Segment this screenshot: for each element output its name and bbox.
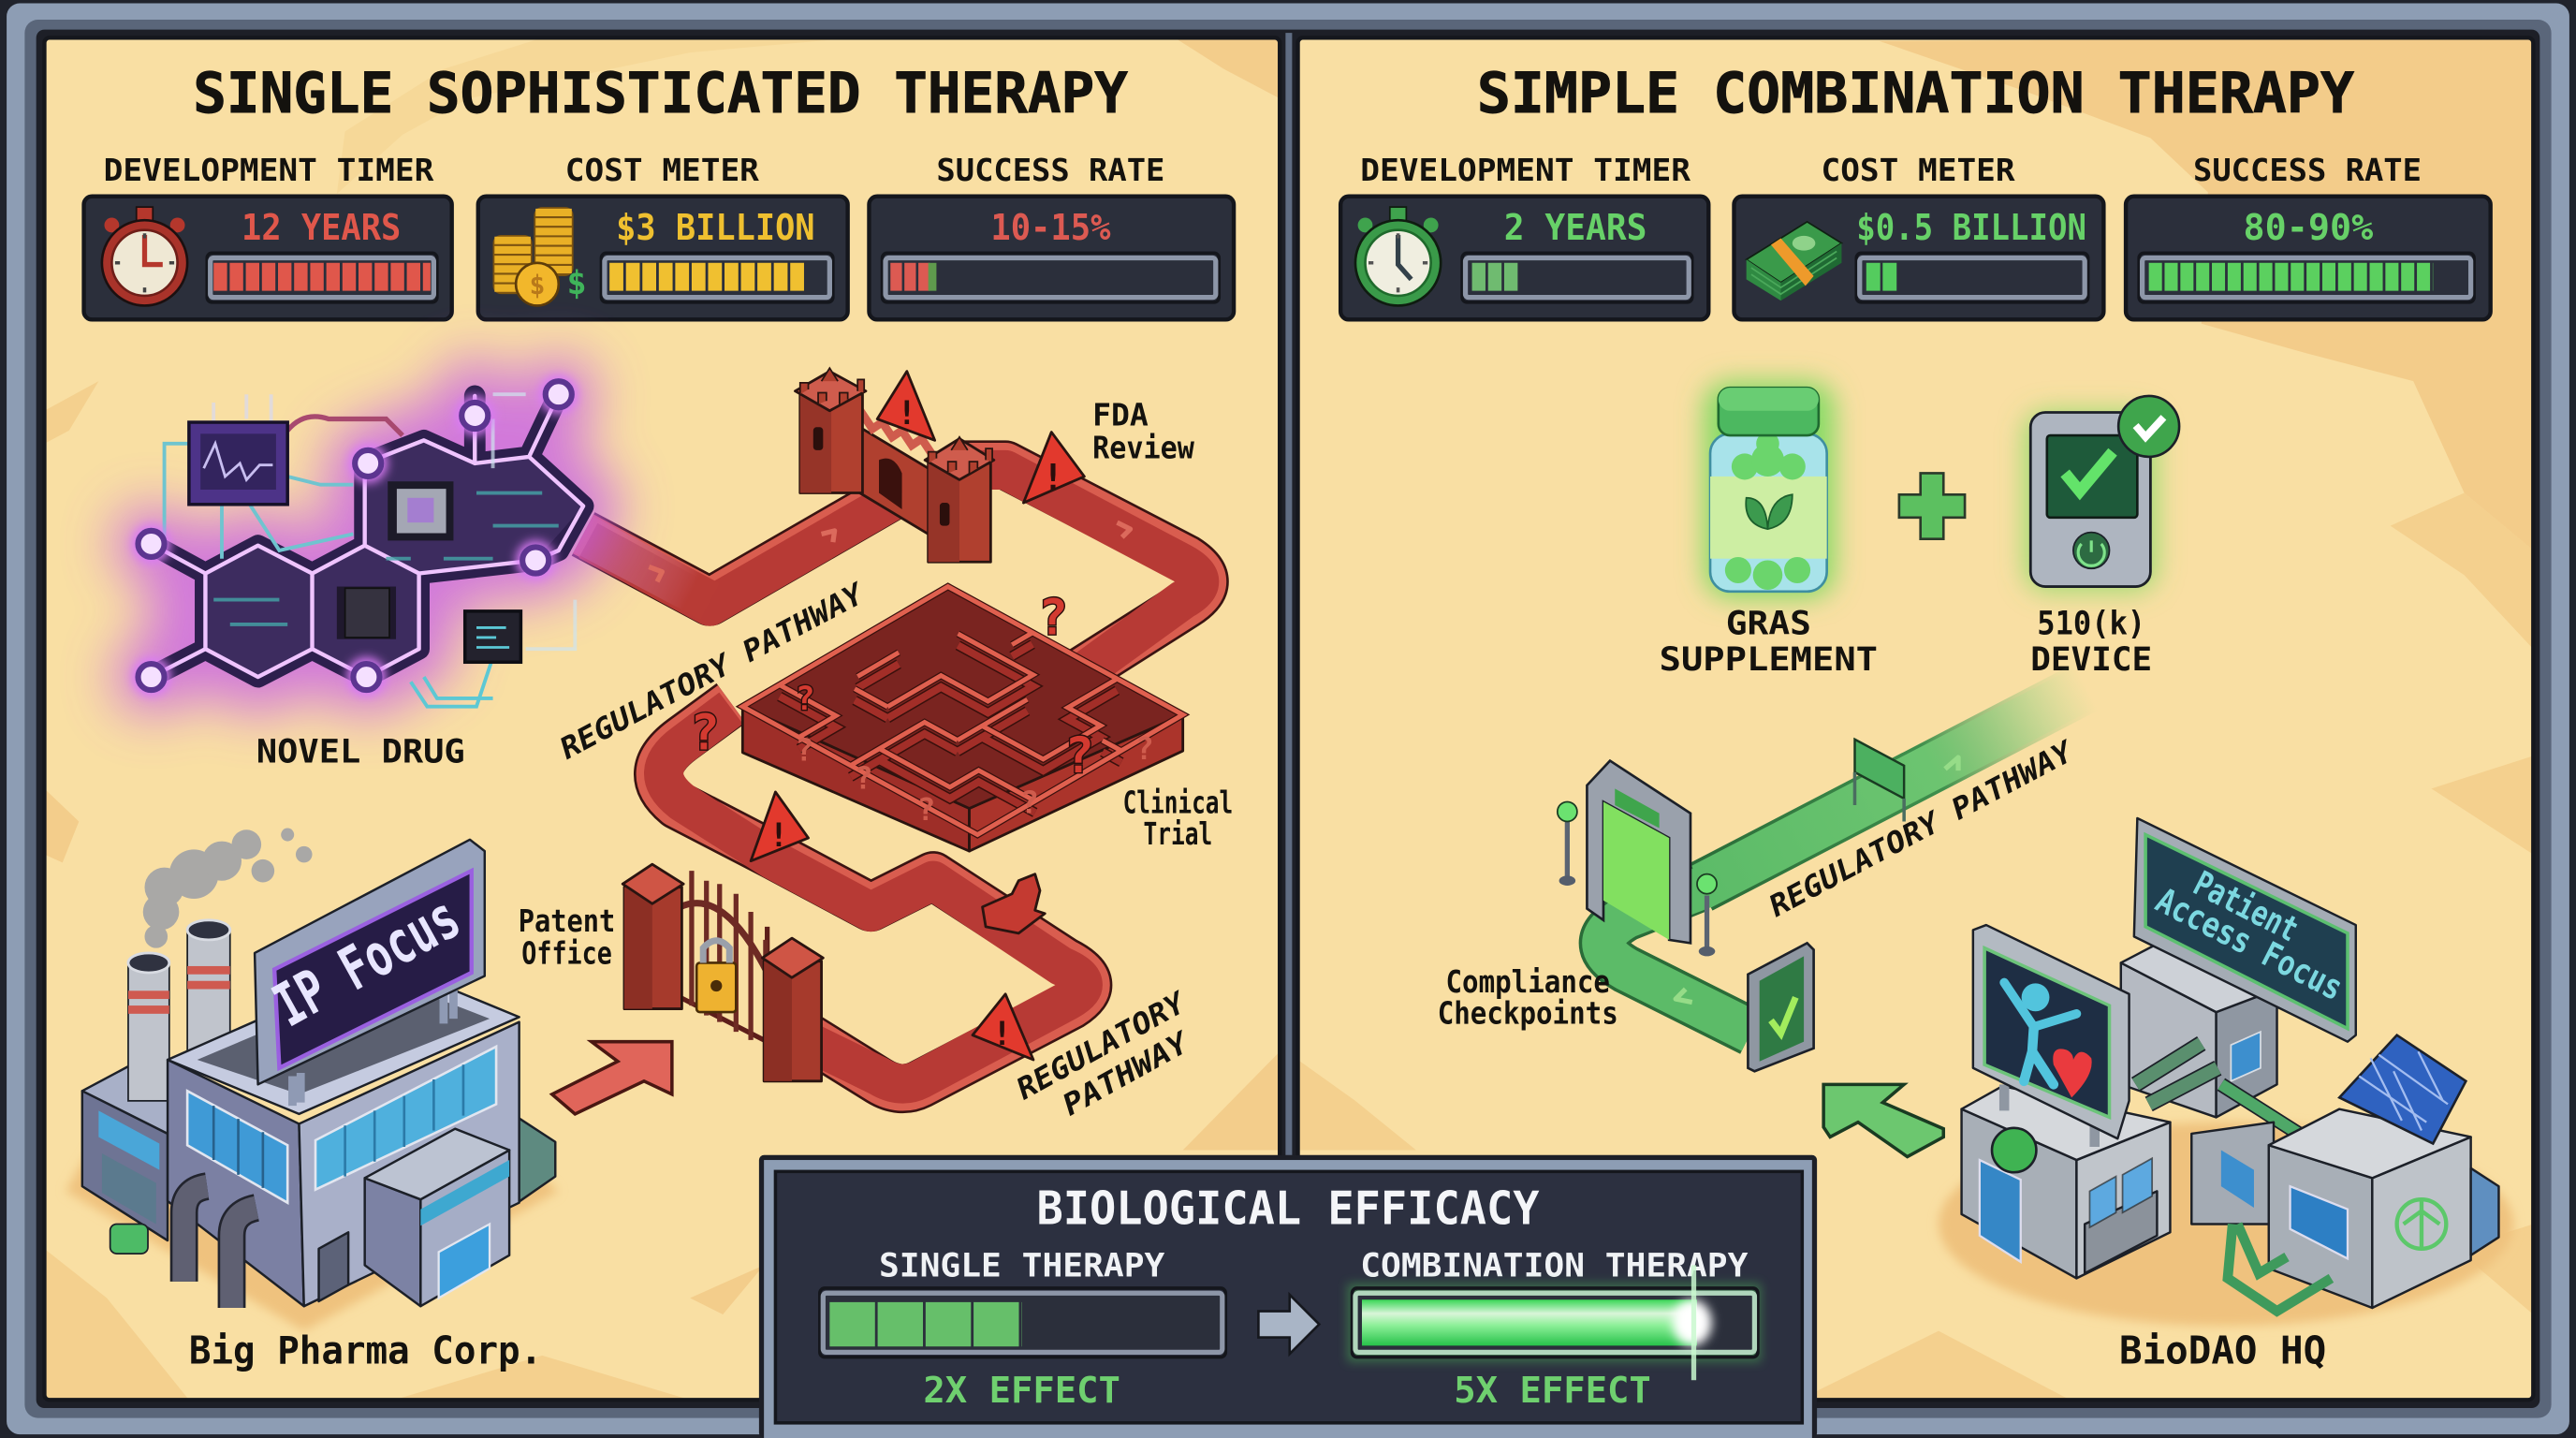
clinical trial maze (742, 587, 1183, 851)
question marks around maze: ? (795, 680, 815, 718)
obstacle on road (983, 874, 1045, 933)
value: 3 billion: $3 BILLION (616, 207, 815, 249)
chip: center (388, 481, 453, 540)
left block (1962, 1086, 2170, 1278)
smoke (143, 829, 313, 948)
label: FDA review: FDA (1092, 397, 1149, 433)
label: single therapy: SINGLE THERAPY (879, 1247, 1164, 1285)
billboard text: Access Focus (2149, 880, 2349, 1008)
icon: gold coins (493, 207, 587, 305)
icon: green stopwatch (1355, 207, 1441, 305)
bar: single therapy (820, 1288, 1225, 1357)
value: 2x effect: 2X EFFECT (923, 1370, 1120, 1412)
compliance gate arch (1587, 761, 1690, 943)
warning sign: top right: ! (1042, 457, 1064, 499)
bar: combination therapy (1347, 1265, 1761, 1380)
side unit (518, 1117, 555, 1203)
question marks around maze: ? (1064, 727, 1094, 785)
label: clinical trial: Clinical (1123, 785, 1233, 821)
billboard: Patient Access Focus (2134, 818, 2356, 1042)
label: 510(k) device (2030, 604, 2152, 679)
heart (2053, 1049, 2092, 1097)
icon: gold coins: $ (567, 264, 587, 302)
clinical trial maze: ? (795, 732, 814, 769)
card: 10-15 percent (869, 197, 1234, 319)
warning sign: lower (973, 994, 1033, 1060)
label: GRAS supplement (1660, 604, 1878, 679)
bar: 80-90 percent (2139, 253, 2474, 302)
side panel (2471, 1168, 2498, 1255)
clinical trial maze: ? (855, 759, 873, 796)
arrow: factory to gate (552, 1042, 672, 1114)
label: compliance checkpoints: Compliance (1445, 963, 1610, 1000)
label: combination therapy: COMBINATION THERAPY (1360, 1247, 1748, 1285)
monitor (189, 422, 287, 505)
solar panel (2339, 1035, 2466, 1143)
warning sign: top left: ! (897, 394, 916, 433)
label: novel drug: NOVEL DRUG (256, 732, 465, 770)
value: 2 years: 2 YEARS (1504, 207, 1647, 249)
red regulatory road (583, 465, 1204, 1089)
icon: novel drug molecule circuit (131, 374, 583, 707)
green pipes (2228, 1224, 2331, 1312)
warning sign: middle (751, 792, 809, 861)
checkpoint door (1748, 943, 1814, 1071)
clinical trial maze: ? (1135, 730, 1154, 767)
icon: cash bundle (1747, 222, 1841, 301)
heading: cost meter right: COST METER (1822, 152, 2016, 188)
label: regulatory pathway upper: REGULATORY PATHWAY (554, 577, 871, 767)
card: 0.5 billion (1734, 197, 2103, 319)
check badge (2118, 396, 2179, 457)
stats: right panel (1340, 152, 2491, 319)
billboard text: Patient (2188, 863, 2305, 949)
label: compliance checkpoints (1438, 963, 1618, 1031)
warning sign: top left (877, 372, 935, 440)
question marks around maze: ? (1038, 589, 1068, 646)
label: BioDAO HQ: BioDAO HQ (2119, 1328, 2326, 1373)
molecule body (152, 394, 583, 677)
chimneys (187, 920, 230, 1062)
warning sign: middle: ! (768, 816, 789, 855)
bar: 10-15 percent (883, 253, 1219, 302)
icon: red stopwatch (102, 207, 187, 305)
billboard: person and heart (1973, 925, 2130, 1147)
label: GRAS supplement: SUPPLEMENT (1660, 640, 1878, 679)
patent office gate (622, 864, 823, 1081)
bar: 12 years (207, 253, 437, 302)
glow: jar and device (1704, 381, 2157, 598)
barrel (110, 1224, 148, 1254)
label: FDA review (1092, 397, 1195, 466)
back tower (2121, 943, 2277, 1117)
fortress: FDA review (795, 368, 994, 562)
person (2004, 983, 2076, 1084)
badge (1992, 1128, 2036, 1172)
billboard text: IP Focus (262, 882, 471, 1040)
main block (168, 1060, 304, 1306)
panel: right background (1298, 37, 2533, 1400)
label: patent office: Office (521, 934, 612, 971)
label: 510(k) device: DEVICE (2030, 640, 2152, 679)
billboard: IP Focus (255, 840, 485, 1106)
lamp post right (1697, 874, 1717, 956)
value: 5x effect: 5X EFFECT (1454, 1370, 1651, 1412)
heading: development timer: DEVELOPMENT TIMER (104, 152, 434, 188)
billboard text (2149, 863, 2349, 1008)
wing (82, 1064, 213, 1240)
clinical trial maze: ? (916, 791, 935, 828)
warning sign: top right (1023, 433, 1084, 503)
panel: left background (44, 37, 1280, 1400)
value: 10-15 percent: 10-15% (990, 207, 1110, 249)
question marks around maze: ? (690, 704, 720, 761)
nodes (131, 374, 578, 697)
question marks around maze (690, 589, 1094, 785)
factory: Big Pharma Corp. (66, 829, 559, 1331)
label: GRAS supplement: GRAS (1726, 604, 1811, 642)
label: regulatory pathway right: REGULATORY PATHWAY (1764, 734, 2080, 924)
bar: 2 years (1462, 253, 1692, 302)
pipes (184, 1186, 256, 1308)
icon: 510(k) device (2030, 396, 2179, 587)
card: 2 years (1340, 197, 1708, 319)
chip: lower (337, 587, 396, 639)
lamp post left (1558, 801, 1577, 886)
label: 510(k) device: 510(k) (2037, 604, 2145, 642)
label: patent office (519, 902, 615, 971)
arrow: HQ to pathway (1823, 1084, 1943, 1157)
label: regulatory pathway lower: PATHWAY (1057, 1025, 1196, 1123)
title: left: SINGLE SOPHISTICATED THERAPY (193, 62, 1128, 126)
value: 12 years: 12 YEARS (242, 207, 401, 249)
circuit traces (165, 394, 575, 707)
chip: right (465, 611, 520, 662)
value: 80-90 percent: 80-90% (2244, 207, 2373, 249)
label: compliance checkpoints: Checkpoints (1438, 994, 1618, 1031)
icon: GRAS supplement jar (1710, 388, 1827, 592)
label: FDA review: Review (1092, 430, 1195, 466)
bar: 3 billion (601, 253, 833, 302)
value: 0.5 billion: $0.5 BILLION (1856, 207, 2086, 249)
label: regulatory pathway lower: REGULATORY (1011, 986, 1193, 1107)
card: 12 years (84, 197, 452, 319)
sign over road (1854, 740, 1904, 822)
label: patent office: Patent (519, 902, 615, 939)
stats: left panel (84, 152, 1234, 319)
connecting pipes (2136, 1043, 2324, 1151)
heading: success rate right: SUCCESS RATE (2193, 152, 2422, 188)
right block (2269, 1109, 2471, 1308)
building: BioDAO HQ (1939, 818, 2513, 1326)
panel: biological efficacy (759, 1155, 1817, 1438)
centre connector (2191, 1123, 2274, 1224)
title: right: SIMPLE COMBINATION THERAPY (1477, 62, 2354, 126)
bar: 0.5 billion (1856, 253, 2088, 302)
card: 3 billion (478, 197, 848, 319)
green regulatory road (1603, 687, 2086, 1032)
arrow: single to combination (1258, 1295, 1319, 1354)
entrance annex (365, 1178, 420, 1306)
heading: development timer right: DEVELOPMENT TIMER (1360, 152, 1691, 188)
label: trial: Trial (1144, 815, 1212, 852)
efficacy heading: BIOLOGICAL EFFICACY (1036, 1181, 1540, 1235)
card: 80-90 percent (2126, 197, 2491, 319)
icon: gold coins: $ (529, 270, 545, 301)
icon: plus (1899, 473, 1965, 539)
label: Big Pharma Corp.: Big Pharma Corp. (189, 1328, 542, 1373)
heading: cost meter: COST METER (565, 152, 760, 188)
warning sign: lower: ! (992, 1015, 1012, 1053)
clinical trial maze: ? (1020, 785, 1039, 821)
heading: success rate: SUCCESS RATE (936, 152, 1164, 188)
